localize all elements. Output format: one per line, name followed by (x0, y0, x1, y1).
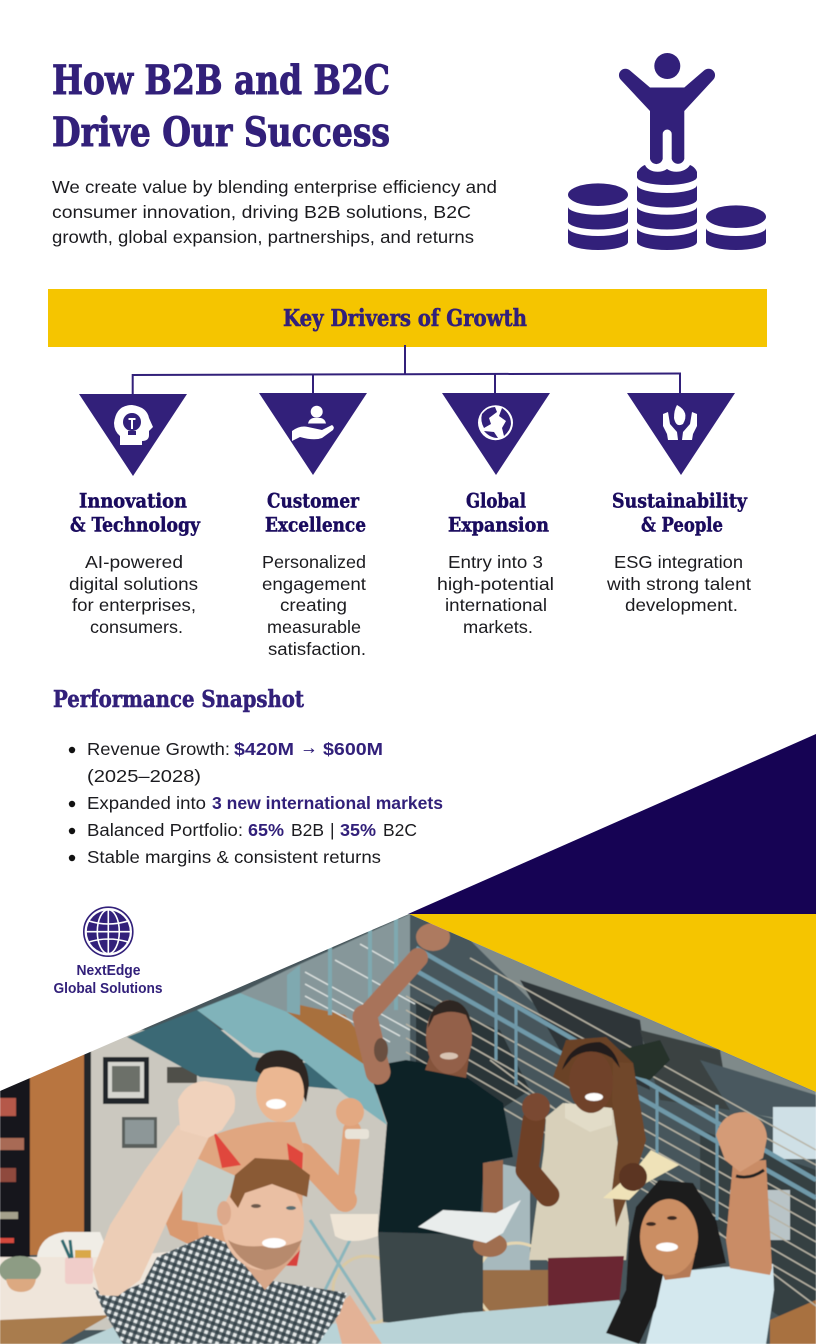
heading: sustainability and people (612, 488, 748, 536)
heading: global expansion: Expansion (448, 512, 549, 536)
list: performance bullets: Balanced Portfolio: (87, 820, 243, 840)
title: Drive Our Success (52, 109, 390, 156)
description: global expansion: Entry into 3 (448, 552, 543, 572)
list: performance bullets (69, 739, 443, 867)
person: man in black polo with raised arm (365, 923, 521, 1324)
list: performance bullets: | (330, 820, 335, 840)
description: global expansion: high-potential (437, 574, 554, 594)
list: performance bullets: Expanded into (87, 793, 206, 813)
list: performance bullets: 65% (248, 820, 284, 840)
icon: hands holding leaf (627, 393, 735, 475)
sofa (73, 1300, 640, 1344)
photo: team celebrating in an office (0, 900, 816, 1344)
panel: innovation and technology (69, 394, 201, 637)
banner: key drivers of growth: Key Drivers of Growth (283, 305, 527, 332)
icon: head with light bulb (79, 394, 187, 476)
heading: global expansion: Global (466, 488, 526, 512)
person: man in checked shirt (93, 1081, 382, 1344)
heading: customer excellence: Excellence (265, 512, 366, 536)
person: woman in white tee (606, 1112, 774, 1344)
description: innovation and technology: digital solutions (69, 574, 198, 594)
banner: key drivers of growth (48, 289, 767, 347)
icon: hand holding person (259, 393, 367, 475)
list: performance bullets: $600M (323, 739, 383, 759)
panel: customer excellence (259, 393, 367, 659)
company name: Global Solutions (54, 981, 162, 997)
icon: globe logo (84, 907, 133, 956)
description: global expansion: markets. (463, 617, 533, 637)
list: performance bullets: 35% (340, 820, 376, 840)
description: sustainability and people (606, 552, 751, 615)
teal staircase (127, 914, 415, 1125)
title: How B2B and B2C (52, 57, 390, 104)
description: customer excellence: Personalized (262, 552, 366, 572)
list: performance bullets: → (303, 744, 315, 757)
heading: customer excellence: Customer (267, 488, 359, 512)
panel: global expansion (437, 393, 554, 637)
panel: sustainability and people (606, 393, 751, 615)
person: woman in cream sweater (522, 1037, 679, 1308)
heading: sustainability and people: & People (641, 512, 723, 536)
list: performance bullets: B2B (291, 820, 324, 840)
list: performance bullets: Revenue Growth: (87, 739, 230, 759)
company name: NextEdge (76, 963, 140, 979)
description: global expansion (437, 552, 554, 637)
list: performance bullets: B2C (383, 820, 417, 840)
description: customer excellence: satisfaction. (268, 639, 366, 659)
decorative navy triangle (408, 734, 816, 914)
person: woman in red top (163, 1050, 369, 1266)
description: customer excellence: engagement (262, 574, 366, 594)
icon: earth globe (442, 393, 550, 475)
description: sustainability and people: ESG integration (614, 552, 743, 572)
heading: innovation and technology: Innovation (79, 488, 187, 512)
intro text: We create value by blending enterprise efficiency and (52, 177, 497, 197)
intro text (52, 177, 497, 247)
heading: sustainability and people: Sustainability (612, 488, 748, 512)
logo: NextEdge Global Solutions (54, 907, 162, 997)
description: innovation and technology: for enterprises, (72, 595, 196, 615)
intro text: growth, global expansion, partnerships, and returns (52, 227, 474, 247)
description: global expansion: international (445, 595, 547, 615)
heading: performance snapshot: Performance Snapshot (53, 686, 304, 713)
decorative yellow triangle (409, 914, 816, 1092)
description: customer excellence: measurable (267, 617, 361, 637)
description: sustainability and people: development. (625, 595, 738, 615)
heading: innovation and technology: & Technology (70, 512, 201, 536)
company name (54, 963, 162, 997)
list: performance bullets: 3 new international markets (212, 793, 443, 813)
description: customer excellence: creating (280, 595, 347, 615)
icon: person standing on coin stacks (568, 53, 766, 250)
list: performance bullets: $420M (234, 739, 294, 759)
description: innovation and technology: consumers. (90, 617, 183, 637)
list: performance bullets: (2025–2028) (87, 766, 201, 786)
heading: customer excellence (265, 488, 366, 536)
description: innovation and technology: AI-powered (85, 552, 183, 572)
title (52, 57, 390, 156)
railings and background on the right (310, 940, 816, 1344)
description: sustainability and people: with strong talent (606, 574, 751, 594)
heading: global expansion (448, 488, 549, 536)
heading: innovation and technology (70, 488, 201, 536)
connector lines (132, 345, 681, 394)
description: customer excellence (262, 552, 366, 659)
intro text: consumer innovation, driving B2B solutions, B2C (52, 202, 471, 222)
list: performance bullets: Stable margins & consistent returns (87, 847, 381, 867)
office wall and furniture on the left (0, 1030, 405, 1344)
description: innovation and technology (69, 552, 198, 637)
